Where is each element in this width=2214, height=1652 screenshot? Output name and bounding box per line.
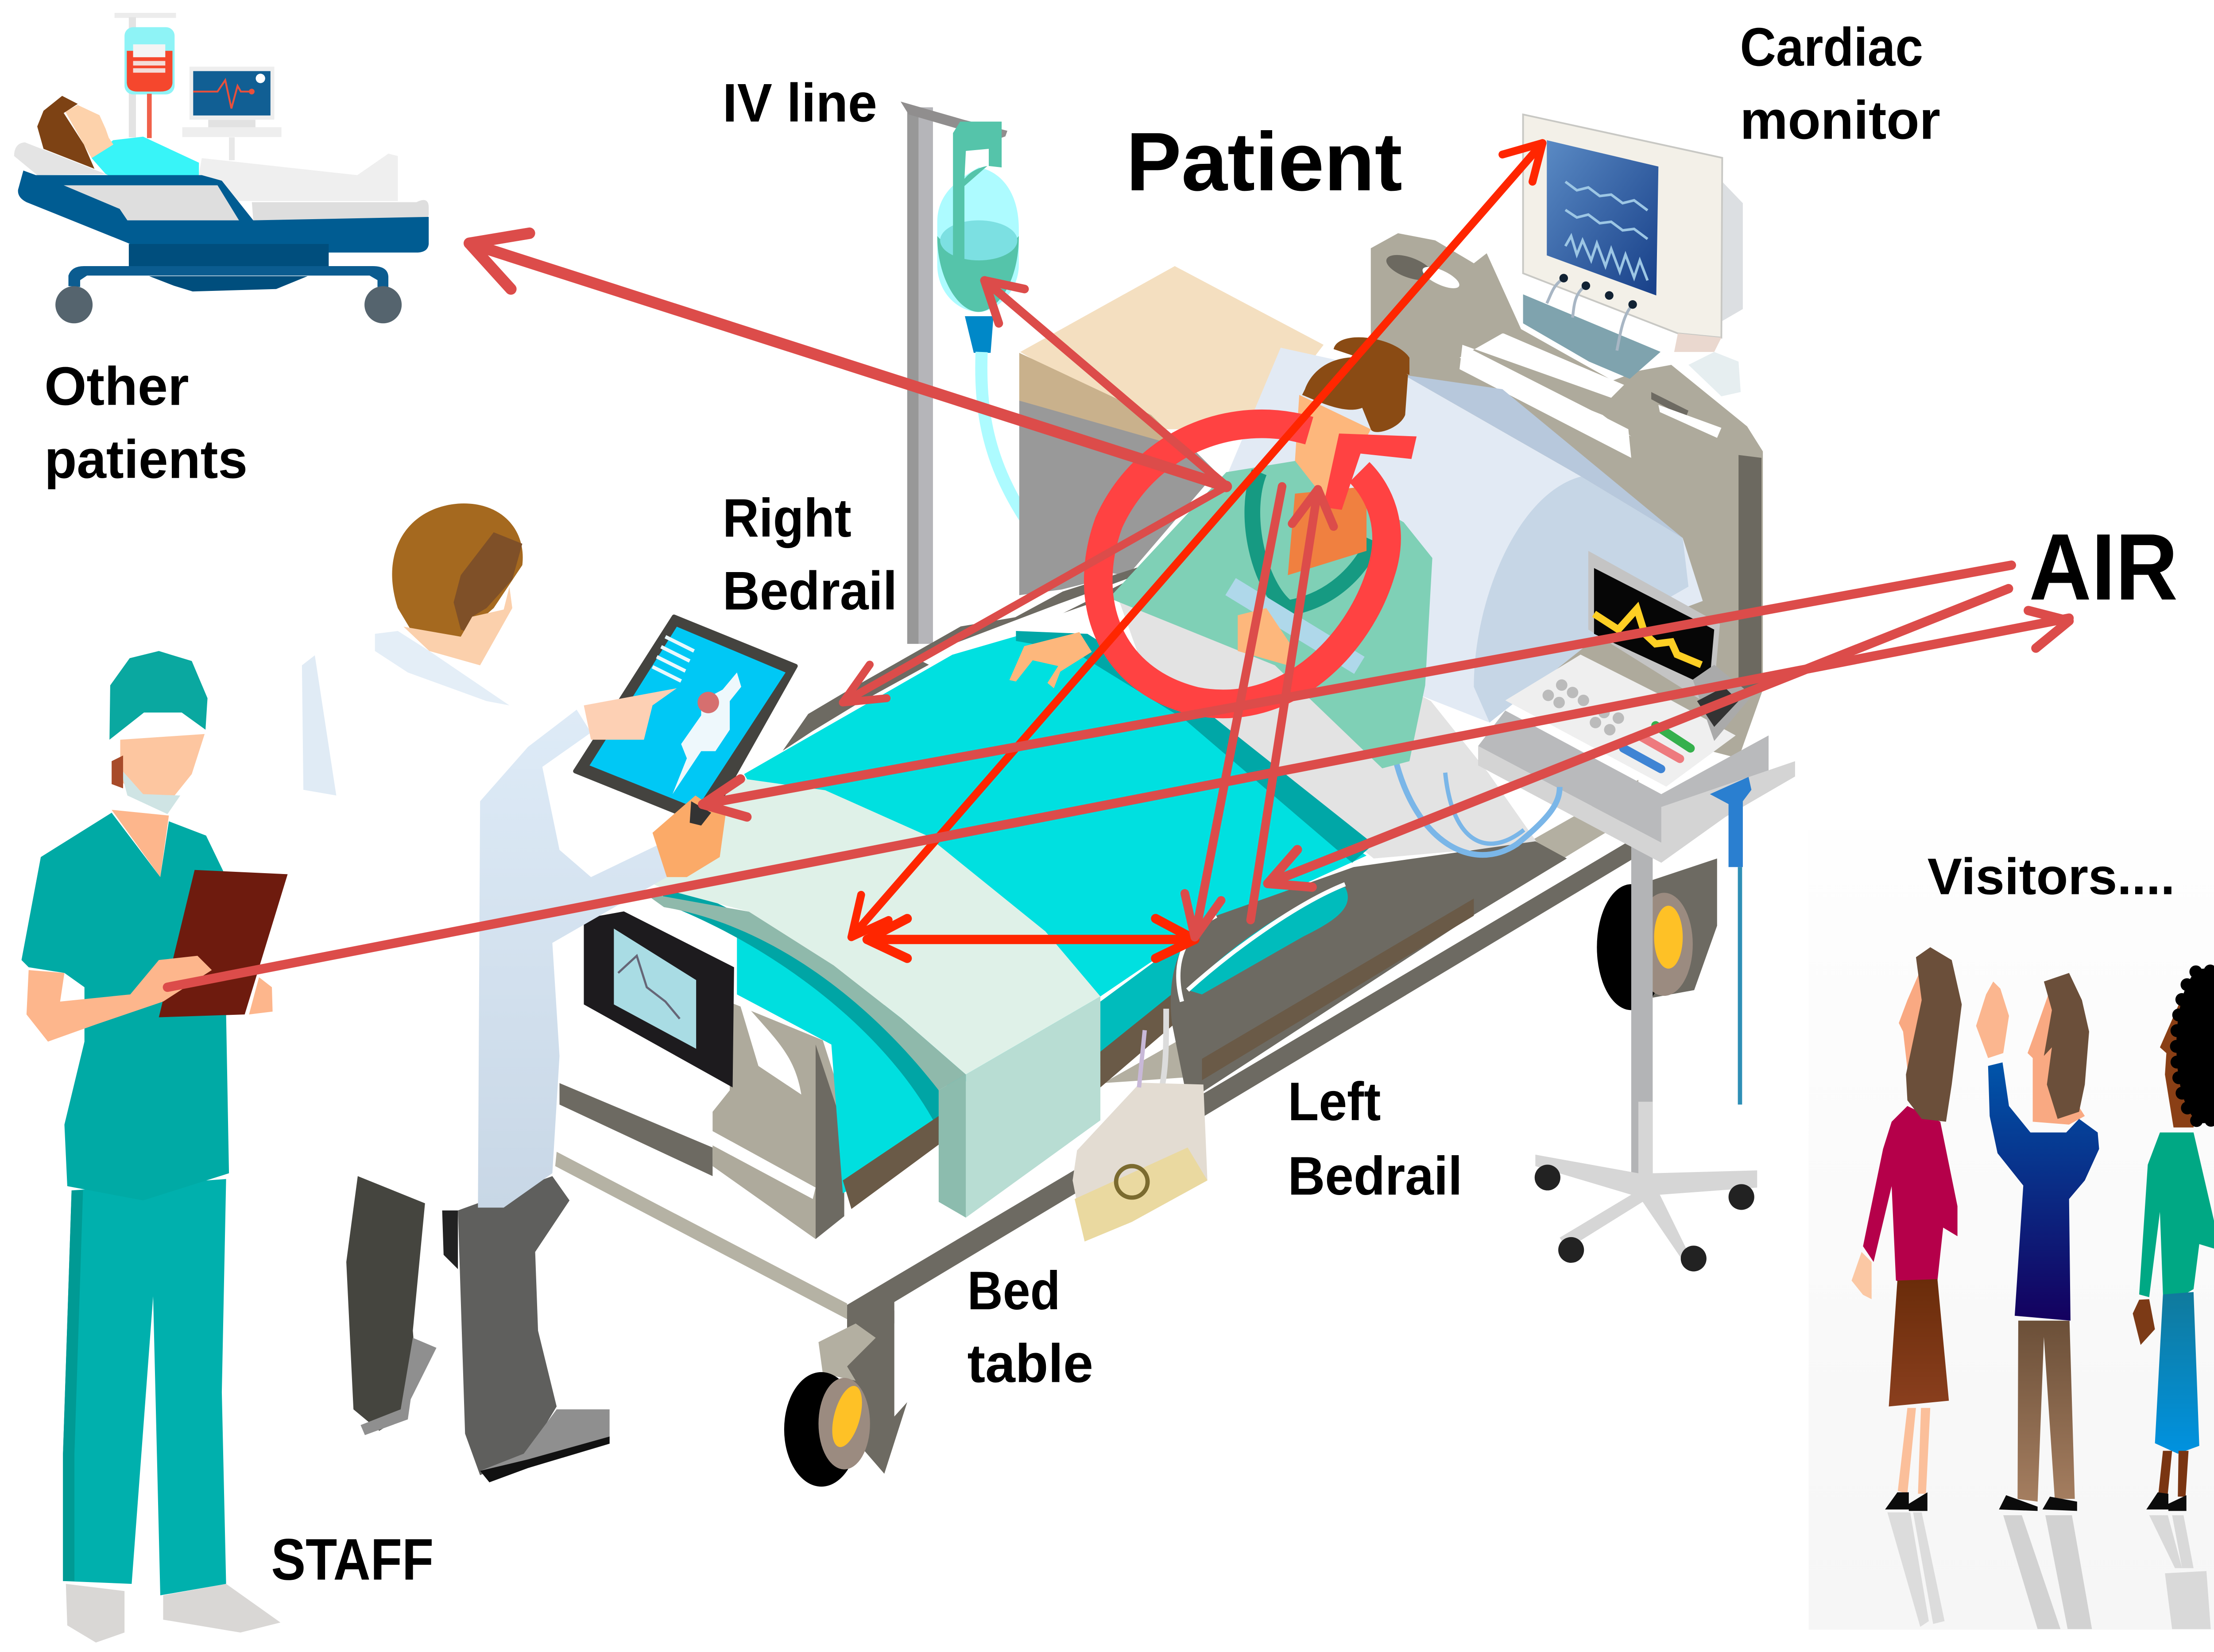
arrow: air to tablet [703, 565, 2011, 817]
label: Left Bedrail: Left [1288, 1072, 1381, 1132]
cart shelf [1478, 711, 1769, 843]
arrow: patient to IV line [984, 280, 1223, 484]
sheet tube [1231, 587, 1359, 665]
arrow: patient down to left bedrail [1185, 487, 1282, 937]
arrow: air to left bedrail [1268, 588, 2009, 887]
icon: other patients in bed [14, 13, 429, 323]
bed frame [555, 780, 1638, 1474]
nurse [22, 651, 288, 1643]
screen [1588, 551, 1720, 701]
doctor head [392, 503, 523, 637]
mattress [744, 636, 1366, 1087]
red circular arrow around patient [1098, 424, 1417, 704]
doctor [302, 503, 796, 1482]
label: Visitors: Visitors.... [1928, 848, 2175, 905]
label: Left Bedrail [1288, 1072, 1463, 1207]
patient [1010, 337, 1432, 768]
label: Other patients [44, 356, 248, 490]
nurse top [22, 812, 229, 1200]
label: Cardiac monitor: monitor [1740, 90, 1940, 151]
keyboard [1506, 654, 1736, 787]
panel: visitors background [1809, 830, 2214, 1630]
hair [1302, 337, 1409, 432]
label: STAFF: STAFF [271, 1527, 434, 1592]
nurse pants [63, 1179, 226, 1595]
arrow: bed table to left bedrail [867, 919, 1195, 958]
arrow: monitor to bed table [852, 143, 1543, 937]
headboard [1371, 233, 1763, 758]
doctor coat shading [302, 655, 336, 796]
label: AIR: AIR [2029, 515, 2178, 620]
label: Bed table: Bed [968, 1261, 1061, 1321]
tablet [575, 617, 796, 824]
gown collar [1252, 472, 1374, 608]
pillow wedge [1020, 266, 1324, 429]
nurse head [120, 734, 205, 810]
icon: cardiac monitor [1523, 115, 1743, 396]
title: Patient: Patient [1126, 115, 1402, 208]
nurse chest skin [112, 810, 169, 877]
bed sheet [1109, 573, 1538, 859]
far bed rail [783, 565, 1159, 751]
nurse hands [140, 956, 212, 1002]
label: Cardiac monitor [1740, 17, 1940, 151]
arrow: left bedrail up to patient [1250, 489, 1334, 920]
nurse shoes [66, 1584, 280, 1643]
arrow: patient to other patients [469, 233, 1226, 487]
patient body [1109, 461, 1432, 768]
label: Right Bedrail [723, 488, 897, 622]
tubes [1395, 758, 1560, 855]
foot board [712, 1002, 847, 1239]
label: IV line: IV line [723, 73, 877, 134]
doctor legs [346, 1176, 425, 1431]
face [1295, 395, 1371, 507]
icon: IV pole and bag [901, 101, 1073, 644]
visitor 2 [1976, 973, 2099, 1629]
rear wheel [1597, 859, 1717, 1010]
front wheel [784, 1372, 870, 1486]
footboard screen [584, 911, 734, 1087]
visitor 3 [2133, 969, 2214, 1629]
icon: hospital bed [555, 233, 1763, 1486]
near bed rail [1162, 841, 1567, 1102]
icon: ventilator cart and screen [1395, 551, 1795, 1271]
label: Other patients: patients [44, 429, 248, 490]
sheet fold across mattress [630, 779, 1100, 1218]
visitors [1852, 947, 2214, 1629]
doctor shoes [360, 1338, 437, 1435]
label: Other patients: Other [44, 356, 189, 417]
probe [1710, 777, 1751, 867]
hands [1010, 632, 1092, 688]
doctor hands [584, 688, 677, 740]
label: Left Bedrail: Bedrail [1288, 1146, 1463, 1207]
nurse arms [27, 956, 212, 1041]
label: Right Bedrail: Right [723, 488, 852, 549]
label: Cardiac monitor: Cardiac [1740, 17, 1923, 78]
backrest sheet [1216, 348, 1703, 723]
visitor 1 [1852, 947, 1962, 1627]
label: Bed table [968, 1261, 1093, 1394]
urine bag [1072, 1030, 1208, 1242]
arrow: staff to air [167, 611, 2069, 987]
label: Right Bedrail: Bedrail [723, 561, 897, 622]
nurse cap [109, 651, 208, 740]
cart pole and base [1535, 844, 1757, 1271]
arrow: patient to right bedrail [843, 487, 1226, 703]
clipboard [159, 870, 288, 1018]
label: Bed table: table [968, 1334, 1093, 1394]
